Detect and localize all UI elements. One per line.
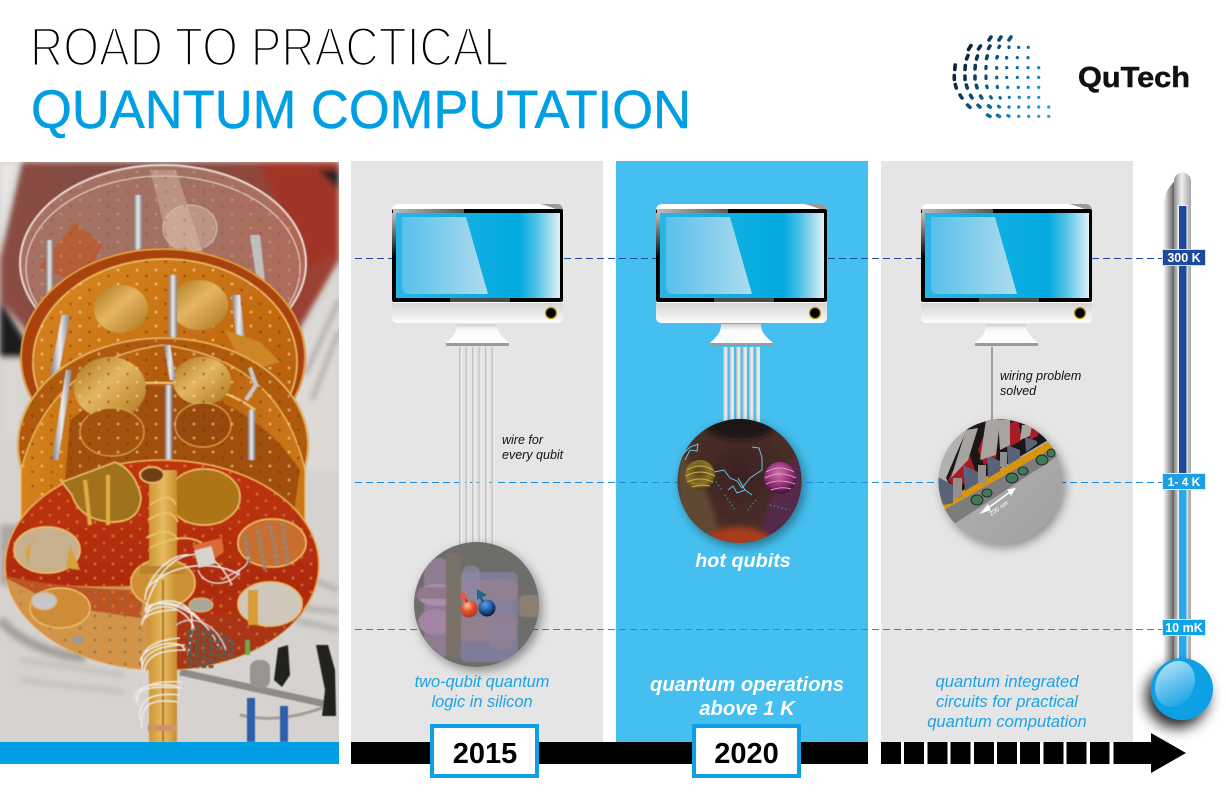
scale arrow: 200 nm: 200 nm [988,500,1010,518]
label: hot qubits: hot qubits [695,550,791,572]
wire: single wire [991,347,993,422]
panel: 2015 [351,161,603,742]
photo: transparent top disc [18,164,308,309]
caption: quantum integrated circuits: quantum computation [927,712,1087,731]
thermometer tube [1174,172,1191,668]
thermometer tube shadow [1163,182,1174,668]
photo background: pipes and lab floor [0,575,339,742]
thermometer [1148,172,1213,720]
logo wordmark: QuTech [1078,62,1190,94]
annotation: wiring problem solved: wiring problem [1000,369,1081,383]
label: 1-4 K: 1- 4 K [1168,475,1201,489]
thermometer bulb [1148,654,1213,720]
timeline arrow [351,733,1186,773]
caption: quantum integrated circuits: circuits for practical [936,692,1079,711]
year box: 2020 [694,726,799,776]
logo: QuTech [954,37,1190,116]
annotation: wire for every qubit: wire for [502,433,544,447]
label: 300 K [1162,250,1206,266]
wires: hot qubits [723,347,760,422]
icon: dotted logo mark [954,37,1049,116]
photo: bottom red disc with cut-outs [0,460,319,680]
caption: two-qubit quantum logic: two-qubit quantum [415,673,549,691]
circle image: silicon qubit device [414,542,541,667]
title: ROAD TO PRACTICAL [30,16,509,78]
thermometer column [1178,205,1188,670]
caption: quantum operations above 1 K: above 1 K [699,698,796,720]
circle image: quantum integrated circuit [930,415,1070,544]
temperature guide lines [355,258,1163,630]
title: QUANTUM COMPUTATION [31,80,691,140]
label: 1-4 K [1162,474,1206,490]
icon: monitor 2015 [392,204,563,346]
photo: cut-out holes in red disc [14,462,306,628]
qubit spins [460,589,496,618]
icon: monitor future [921,204,1092,346]
photo: dilution refrigerator [0,162,339,742]
label: 300 K: 300 K [1167,251,1201,265]
caption: two-qubit quantum logic: logic in silicon [431,693,533,711]
blue bar under photo [0,742,339,764]
annotation: wire for every qubit: every qubit [502,448,564,462]
quantum dots [971,449,1055,505]
title [30,16,691,140]
photo: central gold column [140,467,185,742]
panel: 2020 [616,161,868,742]
photo: first gold disc [19,248,307,400]
caption: quantum integrated circuits: quantum integrated [936,672,1079,691]
year box: 2015: 2015 [453,738,517,770]
circle image: hot qubits [677,411,802,563]
annotation: wiring problem solved: solved [1000,384,1037,398]
icon: monitor 2020 [656,204,827,346]
wires: one wire for every qubit [459,347,496,545]
photo: silver wire loops [134,554,240,728]
year box: 2020: 2020 [714,738,779,770]
photo: gold coil and connectors [146,498,288,668]
panel: future [881,161,1133,742]
label: 10 mK: 10 mK [1165,621,1203,635]
caption: quantum operations above 1 K: quantum operations [650,674,844,696]
photo background: fridge housing [0,162,339,585]
year box: 2015 [432,726,537,776]
photo: second gold disc [16,336,310,521]
